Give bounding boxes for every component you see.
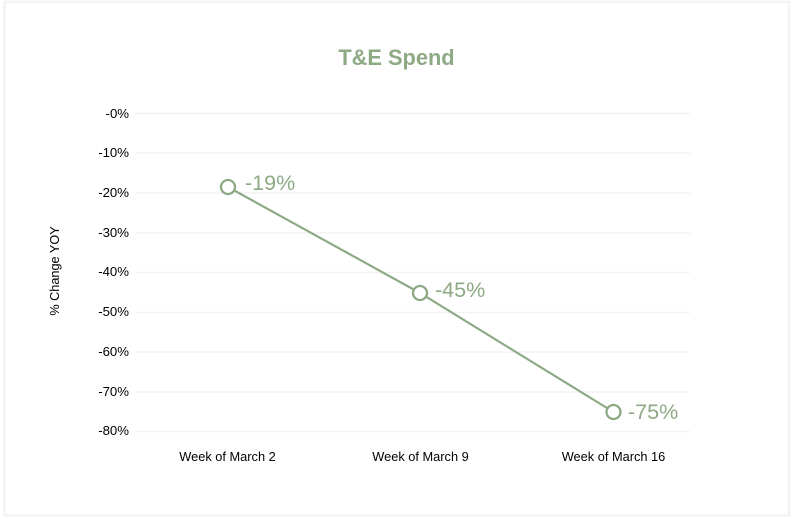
y-axis tick labels: -20% [98,185,129,200]
y-axis tick labels: -80% [98,423,129,438]
line series: T&E spend [221,180,620,419]
data labels: -45% [435,278,485,302]
title: T&E Spend [338,45,455,70]
y-axis tick labels: -0% [106,106,129,121]
y-axis tick labels: -50% [98,304,129,319]
data labels [245,171,678,424]
x-axis labels [179,449,665,464]
y-axis tick labels [98,106,129,438]
data labels: -19% [245,171,295,195]
y-axis tick labels: -60% [98,344,129,359]
y-axis tick labels: -10% [98,145,129,160]
x-axis labels: Week of March 9 [372,449,469,464]
y-axis tick labels: -40% [98,264,129,279]
x-axis labels: Week of March 16 [562,449,665,464]
y-axis tick labels: -30% [98,225,129,240]
data point: week of March 16 [606,405,620,419]
x-axis labels: Week of March 2 [179,449,276,464]
data labels: -75% [628,400,678,424]
data point: week of March 2 [221,180,235,194]
y-axis tick labels: -70% [98,384,129,399]
data point: week of March 9 [413,286,427,300]
y-axis title: % Change YOY [48,226,62,316]
